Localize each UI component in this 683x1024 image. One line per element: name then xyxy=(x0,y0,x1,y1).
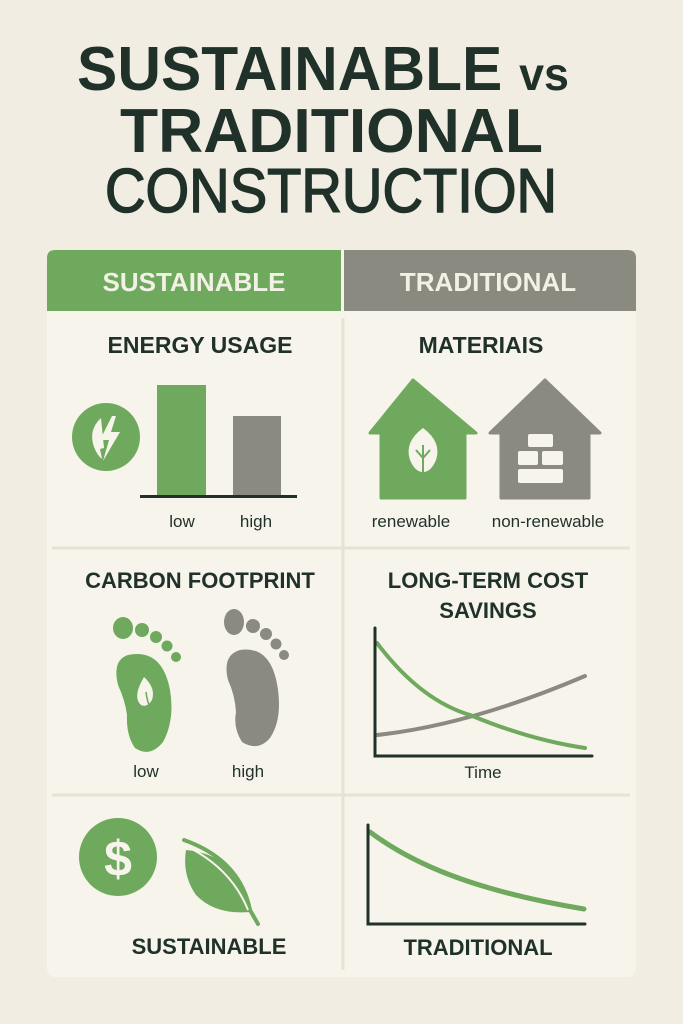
title: TRADITIONAL xyxy=(120,97,543,166)
line chart: traditional xyxy=(368,825,585,924)
icon: dollar: $ xyxy=(104,831,132,887)
line chart xyxy=(375,628,592,756)
title: SUSTAINABLE vs xyxy=(77,35,569,104)
icon: leaf xyxy=(184,840,258,924)
icon: green house xyxy=(370,380,476,498)
panel: carbon footprint: high xyxy=(232,762,264,781)
label: traditional: TRADITIONAL xyxy=(403,935,553,960)
icon: dollar xyxy=(79,818,157,896)
icon: lightning xyxy=(72,403,140,471)
header: traditional xyxy=(344,250,636,311)
header: traditional: TRADITIONAL xyxy=(400,267,576,297)
icon: green footprint xyxy=(113,617,181,752)
heading: materials: MATERIAIS xyxy=(419,332,543,358)
title xyxy=(77,35,569,226)
bar chart: low xyxy=(169,512,195,531)
panel: energy usage xyxy=(72,332,297,531)
card xyxy=(47,250,636,977)
panel: materials: renewable xyxy=(372,512,450,531)
panel: long-term cost savings xyxy=(375,568,592,782)
heading: carbon footprint: CARBON FOOTPRINT xyxy=(85,568,315,593)
panel: materials: non-renewable xyxy=(492,512,604,531)
bar chart: high xyxy=(240,512,272,531)
panel: long-term cost savings: SAVINGS xyxy=(439,598,537,623)
panel: sustainable summary xyxy=(79,818,286,959)
panel: carbon footprint xyxy=(85,568,315,781)
title: CONSTRUCTION xyxy=(105,157,557,226)
heading: long-term cost savings: LONG-TERM COST xyxy=(388,568,589,593)
header: sustainable xyxy=(47,250,341,311)
label: sustainable: SUSTAINABLE xyxy=(132,934,286,959)
panel: materials xyxy=(370,332,604,531)
panel: traditional summary xyxy=(368,825,585,960)
panel: long-term cost savings: Time xyxy=(464,763,502,782)
bar chart xyxy=(140,385,297,531)
icon: gray footprint xyxy=(224,609,289,746)
panel: carbon footprint: low xyxy=(133,762,159,781)
header: sustainable: SUSTAINABLE xyxy=(103,267,285,297)
icon: gray house xyxy=(490,380,600,498)
heading: energy usage: ENERGY USAGE xyxy=(108,332,292,358)
